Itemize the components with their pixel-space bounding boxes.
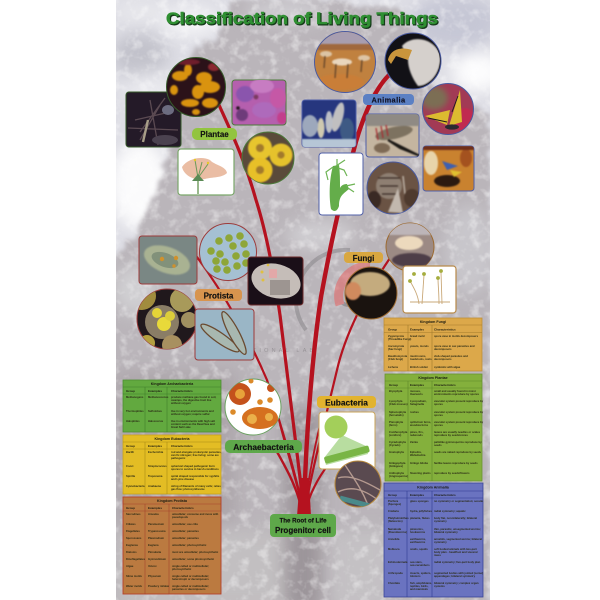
table: Kingdom Protista: unicellular; photosynthetic xyxy=(172,543,207,547)
watermark logo and text xyxy=(218,250,370,354)
branch: Protista xyxy=(197,257,303,510)
table: Kingdom Animalia: sea stars, xyxy=(410,560,423,564)
table: Kingdom Plantae: mosses, xyxy=(410,390,421,393)
table: Kingdom Protista: Plasmodium xyxy=(148,536,165,540)
table: Kingdom Animalia: Examples xyxy=(410,493,424,497)
table: Kingdom Fungi: Ascomycota xyxy=(388,344,404,348)
label: Animalia: Animalia xyxy=(371,95,406,104)
table: Kingdom Plantae: Ginkgo biloba xyxy=(410,461,428,465)
table: Kingdom Eubacteria: pathogenic xyxy=(171,456,186,460)
table: Kingdom Animalia: Mollusca xyxy=(388,547,400,551)
branch: Eubacteria xyxy=(305,425,320,510)
photo: yellow flowers xyxy=(166,58,226,116)
table: Kingdom Plantae: Ginkgophyta xyxy=(389,461,406,465)
table: Kingdom Plantae: (horsetails) xyxy=(389,413,404,417)
label: Plantae xyxy=(192,128,237,140)
title: Classification of Living Things xyxy=(167,11,439,29)
table: Kingdom Protista: Gymnodinium xyxy=(148,557,167,561)
table: Kingdom Protista: Diatoms xyxy=(126,550,137,554)
table: Kingdom Archaebacteria: Great Salt Lake xyxy=(171,425,191,429)
table: Kingdom Animalia: and mammals xyxy=(410,587,428,591)
panel: Archaebacteria illustration xyxy=(225,378,281,435)
table: Kingdom Archaebacteria: without oxygen; require sulfur xyxy=(170,412,210,416)
table: Kingdom Protista: Paramecium xyxy=(148,522,165,526)
table: Kingdom Animalia: insects, spiders, xyxy=(410,571,431,575)
table: Kingdom Eubacteria: spherical shaped pathogenic form xyxy=(171,464,215,468)
table: Kingdom Plantae: (Angiosperms) xyxy=(389,474,408,478)
table: Kingdom Protista: Euglenas xyxy=(126,543,138,547)
table: Kingdom Archaebacteria: Sulfolobus xyxy=(148,409,162,413)
table: Kingdom Animalia: bilateral symmetry; complex organ xyxy=(434,581,479,585)
table: Kingdom Fungi: spore case in sac parasites and xyxy=(434,344,475,348)
table: Kingdom Animalia: pinworms, xyxy=(410,527,424,531)
table: Kingdom Animalia: Cnidaria xyxy=(388,509,399,513)
table: Kingdom Plantae: Coniferophyta xyxy=(389,430,408,434)
photo: ciliate xyxy=(139,236,197,284)
table: Kingdom Fungi: Examples xyxy=(410,328,424,332)
table: Kingdom Eubacteria: Characteristics xyxy=(171,444,193,448)
table: Kingdom Fungi: decomposers xyxy=(434,347,452,351)
table: Kingdom Animalia xyxy=(384,483,483,597)
table: Kingdom Fungi: symbiotic with algae xyxy=(434,365,461,369)
label: Fungi xyxy=(344,252,383,263)
photo: green algae colony xyxy=(200,224,256,280)
table: Kingdom Eubacteria: spiral shaped responsible for syphilis xyxy=(171,474,220,478)
table: Kingdom Plantae: Lycopodium, xyxy=(410,399,427,403)
table: Kingdom Plantae: (conifers) xyxy=(389,433,401,437)
table: Kingdom Animalia: Arthropoda xyxy=(388,571,403,575)
table: Kingdom Plantae: seeds are naked reproduce by seeds xyxy=(434,450,482,454)
branch: Plantae xyxy=(219,105,304,510)
label: Eubacteria xyxy=(317,396,376,408)
table: Kingdom Animalia: bilateral symmetry xyxy=(434,530,458,534)
branch: Archaebacteria upper xyxy=(280,425,303,510)
table: Kingdom Animalia: body plan - head/foot and visceral xyxy=(434,550,478,554)
table: Kingdom Plantae: Zamia xyxy=(410,440,418,444)
photo: dark plant xyxy=(126,92,181,147)
table: Kingdom Eubacteria: rod and elongate prokaryotic parasites, xyxy=(171,450,222,454)
table: Kingdom Protista: Powdery mildew xyxy=(148,584,170,588)
table: Kingdom Eubacteria: Kingdom Eubacteria xyxy=(155,437,190,441)
table: Kingdom Animalia: glass sponges xyxy=(410,499,429,503)
table: Kingdom Animalia: (Roundworms) xyxy=(388,530,407,534)
table: Kingdom Protista: parasites or decomposers xyxy=(172,587,206,591)
table: Kingdom Archaebacteria: Thermophiles xyxy=(126,409,144,413)
photo: bald eagle xyxy=(385,33,441,89)
label: Protista xyxy=(195,289,242,301)
diagram: green hydra xyxy=(319,153,363,215)
table: Kingdom Animalia: snails, squids xyxy=(410,547,428,551)
branch: Archaebacteria xyxy=(276,450,302,510)
label: Archaebacteria: Archaebacteria xyxy=(233,442,294,452)
table: Kingdom Fungi: bread mold xyxy=(410,334,425,338)
photo: yellow daisies xyxy=(242,132,294,184)
table: Kingdom Animalia: mass xyxy=(434,554,441,557)
table: Kingdom Archaebacteria: Halophiles xyxy=(126,419,140,423)
photo: filament bacteria xyxy=(335,461,381,507)
table: Kingdom Protista: unicellular; some photosynthetic xyxy=(172,557,215,561)
table: Kingdom Plantae: (ferns) xyxy=(389,423,397,427)
table: Kingdom Fungi: club-shaped parasites and xyxy=(434,354,468,358)
photo: dark protist cell xyxy=(247,257,305,305)
table: Kingdom Plantae: (Ginkgoes) xyxy=(389,464,403,468)
table: Kingdom Eubacteria: Examples xyxy=(148,444,162,448)
table: Kingdom Plantae: vascular system present reproduce by xyxy=(434,420,484,424)
table: Kingdom Fungi: yeasts, morels xyxy=(410,344,429,348)
table: Kingdom Fungi: Lichens xyxy=(388,365,399,369)
table: Kingdom Plantae: environments reproduce by spores xyxy=(434,392,479,396)
table: Kingdom Archaebacteria: without oxygen xyxy=(170,401,191,405)
table: Kingdom Protista: single celled or multicellular; xyxy=(172,574,209,578)
table: Kingdom Fungi xyxy=(384,318,482,371)
branches of the tree of life xyxy=(197,75,390,510)
table: Kingdom Plantae: reproduce by seeds/flowers xyxy=(434,471,470,475)
diagram: flower cross-section xyxy=(178,149,234,195)
table: Kingdom Animalia: segmented bodies with jointed (some) xyxy=(434,571,483,575)
table: Kingdom Protista: Euglena xyxy=(148,543,159,547)
table: Kingdom Fungi: (Sac fungi) xyxy=(388,347,402,351)
table: Kingdom Animalia: annelids, segmented worms; bilateral xyxy=(434,537,482,541)
table: Kingdom Fungi: toadstools, rusts xyxy=(410,357,432,361)
panel: Eubacteria illustrations xyxy=(319,412,381,507)
table: Kingdom Protista: single celled or multicellular; xyxy=(172,584,209,588)
table: Kingdom Animalia: earthworms xyxy=(410,540,426,544)
table: Kingdom Archaebacteria: Examples xyxy=(148,389,162,393)
table: Kingdom Plantae: Pterophyta xyxy=(389,420,404,424)
table: Kingdom Animalia: Characteristics xyxy=(434,493,456,497)
branch: Fungi xyxy=(305,258,390,510)
table: Kingdom Plantae: flowering plants xyxy=(410,471,431,475)
table: Kingdom Animalia: Chordata xyxy=(388,581,400,585)
branch: Eubacteria lower xyxy=(306,465,328,510)
table: Kingdom Plantae: spores xyxy=(434,423,443,427)
table: Kingdom Eubacteria: Cyanobacteria xyxy=(126,484,145,488)
table: Kingdom Animalia: soft bodied animals with two-part xyxy=(434,547,477,551)
table: Kingdom Animalia: (flatworms) xyxy=(388,519,403,523)
table: Kingdom Animalia: reptiles, birds, xyxy=(410,584,429,588)
table: Kingdom Animalia: sea cucumbers xyxy=(410,563,430,567)
table: Kingdom Plantae: Gnetophyta xyxy=(389,450,404,454)
table: Kingdom Protista: Examples xyxy=(148,506,162,510)
table: Kingdom Plantae: (Club mosses) xyxy=(389,402,408,406)
label: Animalia xyxy=(363,94,414,105)
table: Kingdom Protista: Algae xyxy=(126,564,134,568)
table: Kingdom Archaebacteria: content such as the Dead Sea and xyxy=(171,422,215,426)
table: Kingdom Eubacteria: and Lyme disease xyxy=(171,477,195,481)
table: Kingdom Fungi: Zygomycota xyxy=(388,334,404,338)
label: Eubacteria: Eubacteria xyxy=(325,397,368,407)
table: Kingdom Fungi: mushrooms, xyxy=(410,354,426,358)
photo: tiger xyxy=(367,162,420,214)
table: Kingdom Plantae: Anthophyta xyxy=(389,471,404,475)
table: Kingdom Fungi: spore case in molds decomposers xyxy=(434,334,479,338)
table: Kingdom Plantae: spores xyxy=(434,402,443,406)
table: Kingdom Plantae: Selaginella xyxy=(410,402,425,406)
photo: orange fish in coral xyxy=(423,146,474,191)
table: Kingdom Protista: most are unicellular; photosynthetic xyxy=(172,550,219,554)
table: Kingdom Archaebacteria: Methanococcus xyxy=(148,395,169,399)
table: Kingdom Archaebacteria: swamps, the digestive tract live xyxy=(171,398,212,402)
table: Kingdom Protista: Flagellates xyxy=(126,529,140,533)
table: Kingdom Archaebacteria: Kingdom Archaebacteria xyxy=(151,382,194,386)
table: Kingdom Eubacteria: gas flow; photosynthesize xyxy=(171,487,205,491)
table: Kingdom Plantae: Group xyxy=(389,383,398,387)
table: Kingdom Plantae: woodsia ferns xyxy=(409,423,429,427)
table: Kingdom Animalia: thin, parasitic, unsegmented worms; xyxy=(434,527,481,531)
table: Kingdom Animalia: fish, amphibians, xyxy=(410,581,432,585)
table: Kingdom Plantae: Examples xyxy=(410,383,424,387)
table: Kingdom Protista: Physarum xyxy=(148,574,162,578)
table: Kingdom Protista: Trypanosoma xyxy=(148,529,166,533)
table: Kingdom Plantae: small and usually found in moist xyxy=(434,389,476,393)
table: Kingdom Protista: heterotroph or decomposers xyxy=(172,577,209,581)
table: Kingdom Archaebacteria: live in very hot environments and xyxy=(171,409,214,413)
table: Kingdom Eubacteria: can fix nitrogen; free living; some are xyxy=(171,453,219,457)
table: Kingdom Plantae: leaves are usually needles or scales xyxy=(434,430,481,434)
table: Kingdom Plantae: reproduce by seeds/cones xyxy=(434,433,468,437)
panel: Protista photos xyxy=(128,224,305,360)
table: Kingdom Plantae: spores xyxy=(434,413,443,417)
table: Kingdom Plantae: palmlike gymnosperms reproduce by xyxy=(434,440,482,444)
table: Kingdom Protista: single celled or multicellular; xyxy=(172,564,209,568)
table: Kingdom Protista: Ciliates xyxy=(126,522,136,526)
poster background: tree against clouds xyxy=(100,0,504,600)
diagram: green bacterium xyxy=(319,412,375,469)
table: Kingdom Plantae: pines, firs, xyxy=(410,430,424,434)
branch: Animalia xyxy=(304,75,389,510)
photo: white mushroom xyxy=(386,223,434,271)
table: Kingdom Animalia: planaria, flukes xyxy=(410,516,430,520)
photo: yellow cells xyxy=(136,288,196,350)
table: Kingdom Protista: Volvox xyxy=(148,564,157,568)
table: Kingdom Plantae: fanlike leaves reproduce by seeds xyxy=(434,461,478,465)
label: Archaebacteria xyxy=(225,440,302,453)
table: Kingdom Protista: Pinnularia xyxy=(148,550,161,554)
table: Kingdom Plantae: Characteristics xyxy=(434,383,456,387)
table: Kingdom Animalia: Porifera xyxy=(388,499,399,503)
table: Kingdom Protista: Kingdom Protista xyxy=(157,499,188,503)
table: Kingdom Plantae: splitstrom ferns, xyxy=(410,420,431,424)
label: Fungi: Fungi xyxy=(353,254,374,263)
table: Kingdom Protista: Slime molds xyxy=(126,574,142,578)
table: Kingdom Plantae: liverworts xyxy=(410,392,423,396)
label: The Root of Life, Progenitor cell: Progenitor cell xyxy=(275,526,331,535)
table: Kingdom Plantae: Kingdom Plantae xyxy=(418,376,448,380)
table: Kingdom Animalia: appendages; bilateral symmetry xyxy=(434,574,476,578)
table: Kingdom Animalia: body flat, non-bilaterally; bilateral xyxy=(434,516,477,520)
table: Kingdom Protista: Amoeba xyxy=(148,512,159,516)
table: Kingdom Protista xyxy=(123,497,221,594)
table: Kingdom Protista: Group xyxy=(126,506,135,510)
title: Classification of Living Things xyxy=(166,10,438,28)
photo: sea sponge xyxy=(302,100,356,148)
table: Kingdom Archaebacteria: Group xyxy=(126,389,135,393)
table: Kingdom Plantae: vascular system present reproduce by xyxy=(434,399,484,403)
table: Kingdom Plantae: Bryophyta xyxy=(389,389,403,393)
table: Kingdom Archaebacteria xyxy=(123,380,221,432)
table: Kingdom Animalia: earthworms, xyxy=(410,537,426,541)
table: Kingdom Protista: Characteristics xyxy=(172,506,194,510)
table: Kingdom Plantae: Sphenophyta xyxy=(389,410,407,414)
table: Kingdom Protista: Sarcodines xyxy=(126,512,141,516)
table: Kingdom Animalia: Platyhelminthes xyxy=(388,516,409,520)
table: Kingdom Fungi: Group xyxy=(388,328,397,332)
table: Kingdom Fungi: decomposers xyxy=(434,357,452,361)
table: Kingdom Protista: pseudopods xyxy=(172,515,188,519)
table: Kingdom Protista: Dinoflagellates xyxy=(126,557,146,561)
table: Kingdom Animalia: Kingdom Animalia xyxy=(417,486,450,490)
table: Kingdom Animalia: hydra, jellyfishes xyxy=(410,509,432,513)
panel: Fungi photos xyxy=(345,223,456,319)
table: Kingdom Plantae: (Cycads) xyxy=(389,443,400,447)
table: Kingdom Plantae: Welwitschia xyxy=(410,453,426,457)
table: Kingdom Fungi: Basidiomycota xyxy=(388,354,408,358)
table: Kingdom Protista: Water molds xyxy=(126,584,143,588)
photo: lizard xyxy=(366,114,420,157)
table: Kingdom Fungi: Kingdom Fungi xyxy=(420,320,446,324)
table: Kingdom Archaebacteria: produce methane gas found in soil, xyxy=(171,395,216,399)
table: Kingdom Fungi: (Threadlike Fungi) xyxy=(388,337,411,341)
label: The Root of Life, Progenitor cell xyxy=(270,514,336,537)
table: Kingdom Animalia: systems xyxy=(434,584,445,588)
table: Kingdom Fungi: Characteristics xyxy=(434,328,456,332)
table: Kingdom Archaebacteria: live in environments with high salt xyxy=(171,419,215,423)
panel: Plantae photos xyxy=(126,58,294,195)
table: Kingdom Plantae: redwoods xyxy=(410,433,423,437)
photo: diatoms xyxy=(195,309,254,360)
table: Kingdom Eubacteria: Cocci xyxy=(126,464,134,468)
table: Kingdom Plantae xyxy=(385,374,484,481)
label: Plantae: Plantae xyxy=(200,130,229,139)
table: Kingdom Animalia: (Sponges) xyxy=(388,502,401,506)
table: Kingdom Eubacteria: Group xyxy=(126,444,135,448)
photo: pink flowers xyxy=(232,79,287,125)
diagram: bread mold xyxy=(403,266,456,313)
table: Kingdom Protista: Sporozoans xyxy=(126,536,142,540)
table: Kingdom Animalia: symmetry xyxy=(434,519,447,523)
table: Kingdom Protista: unicellular; use cilia xyxy=(172,522,198,526)
table: Kingdom Animalia: Echinodermata xyxy=(388,560,408,564)
table: Kingdom Eubacteria: spores to survive in harsh conditions xyxy=(171,467,219,471)
table: Kingdom Animalia: hookworms xyxy=(410,530,426,534)
table: Kingdom Animalia: radial symmetry; aquatic xyxy=(434,509,466,513)
table: Kingdom Animalia: no symmetry or segmentation; sessile xyxy=(434,499,483,503)
photo: dark fungus xyxy=(345,267,397,319)
table: Kingdom Animalia: Nematoda xyxy=(388,527,401,531)
table: Kingdom Plantae: Cycadophyta xyxy=(389,440,406,444)
label: The Root of Life, Progenitor cell: The Root of Life xyxy=(279,518,327,524)
table: Kingdom Eubacteria: string of filaments of many cells; relies xyxy=(171,484,221,488)
table: Kingdom Animalia: lobsters xyxy=(410,574,421,578)
table: Kingdom Eubacteria: Escherichia xyxy=(148,450,164,454)
table: Kingdom Archaebacteria: Characteristics xyxy=(171,389,193,393)
label: Protista: Protista xyxy=(204,291,234,300)
table: Kingdom Animalia: Group xyxy=(388,493,397,497)
table: Kingdom Fungi: (Club fungi) xyxy=(388,357,403,361)
table: Kingdom Animalia: symmetry xyxy=(434,540,447,544)
photo: antelope xyxy=(314,30,376,92)
table: Kingdom Plantae: Ephedra, xyxy=(410,450,422,454)
table: Kingdom Protista: unicellular; consume and move with xyxy=(172,512,219,516)
watermark logo and text: EDUCATIONAL LAB xyxy=(218,348,316,354)
table: Kingdom Animalia: Annelida xyxy=(388,537,400,541)
table: Kingdom Archaebacteria: Methanogens xyxy=(126,395,144,399)
table: Kingdom Plantae: Lycophyta xyxy=(389,399,403,403)
table: Kingdom Archaebacteria: Halococcus xyxy=(148,419,164,423)
table: Kingdom Eubacteria xyxy=(123,435,222,494)
table: Kingdom Protista: unicellular; parasites xyxy=(172,529,199,533)
table: Kingdom Eubacteria: Treponema xyxy=(148,474,163,478)
table: Kingdom Eubacteria: Streptococcus xyxy=(148,464,167,468)
table: Kingdom Plantae: rushes xyxy=(410,410,419,414)
photo: swallowtail butterfly xyxy=(420,84,475,134)
table: Kingdom Protista: photosynthetic xyxy=(172,567,192,571)
table: Kingdom Plantae: seeds xyxy=(434,443,442,447)
table: Kingdom Eubacteria: Spirilla xyxy=(126,474,135,478)
table: Kingdom Fungi: British soldier xyxy=(410,365,428,369)
tree base xyxy=(297,478,311,516)
panel: Animalia photos xyxy=(302,30,475,215)
table: Kingdom Eubacteria: Bacilli xyxy=(126,450,134,454)
table: Kingdom Animalia: radial symmetry; five-part body plan xyxy=(434,560,481,564)
table: Kingdom Plantae: vascular system present reproduce by xyxy=(434,410,484,414)
table: Kingdom Eubacteria: Anabaena xyxy=(148,484,161,488)
table: Kingdom Protista: unicellular; parasites xyxy=(172,536,199,540)
